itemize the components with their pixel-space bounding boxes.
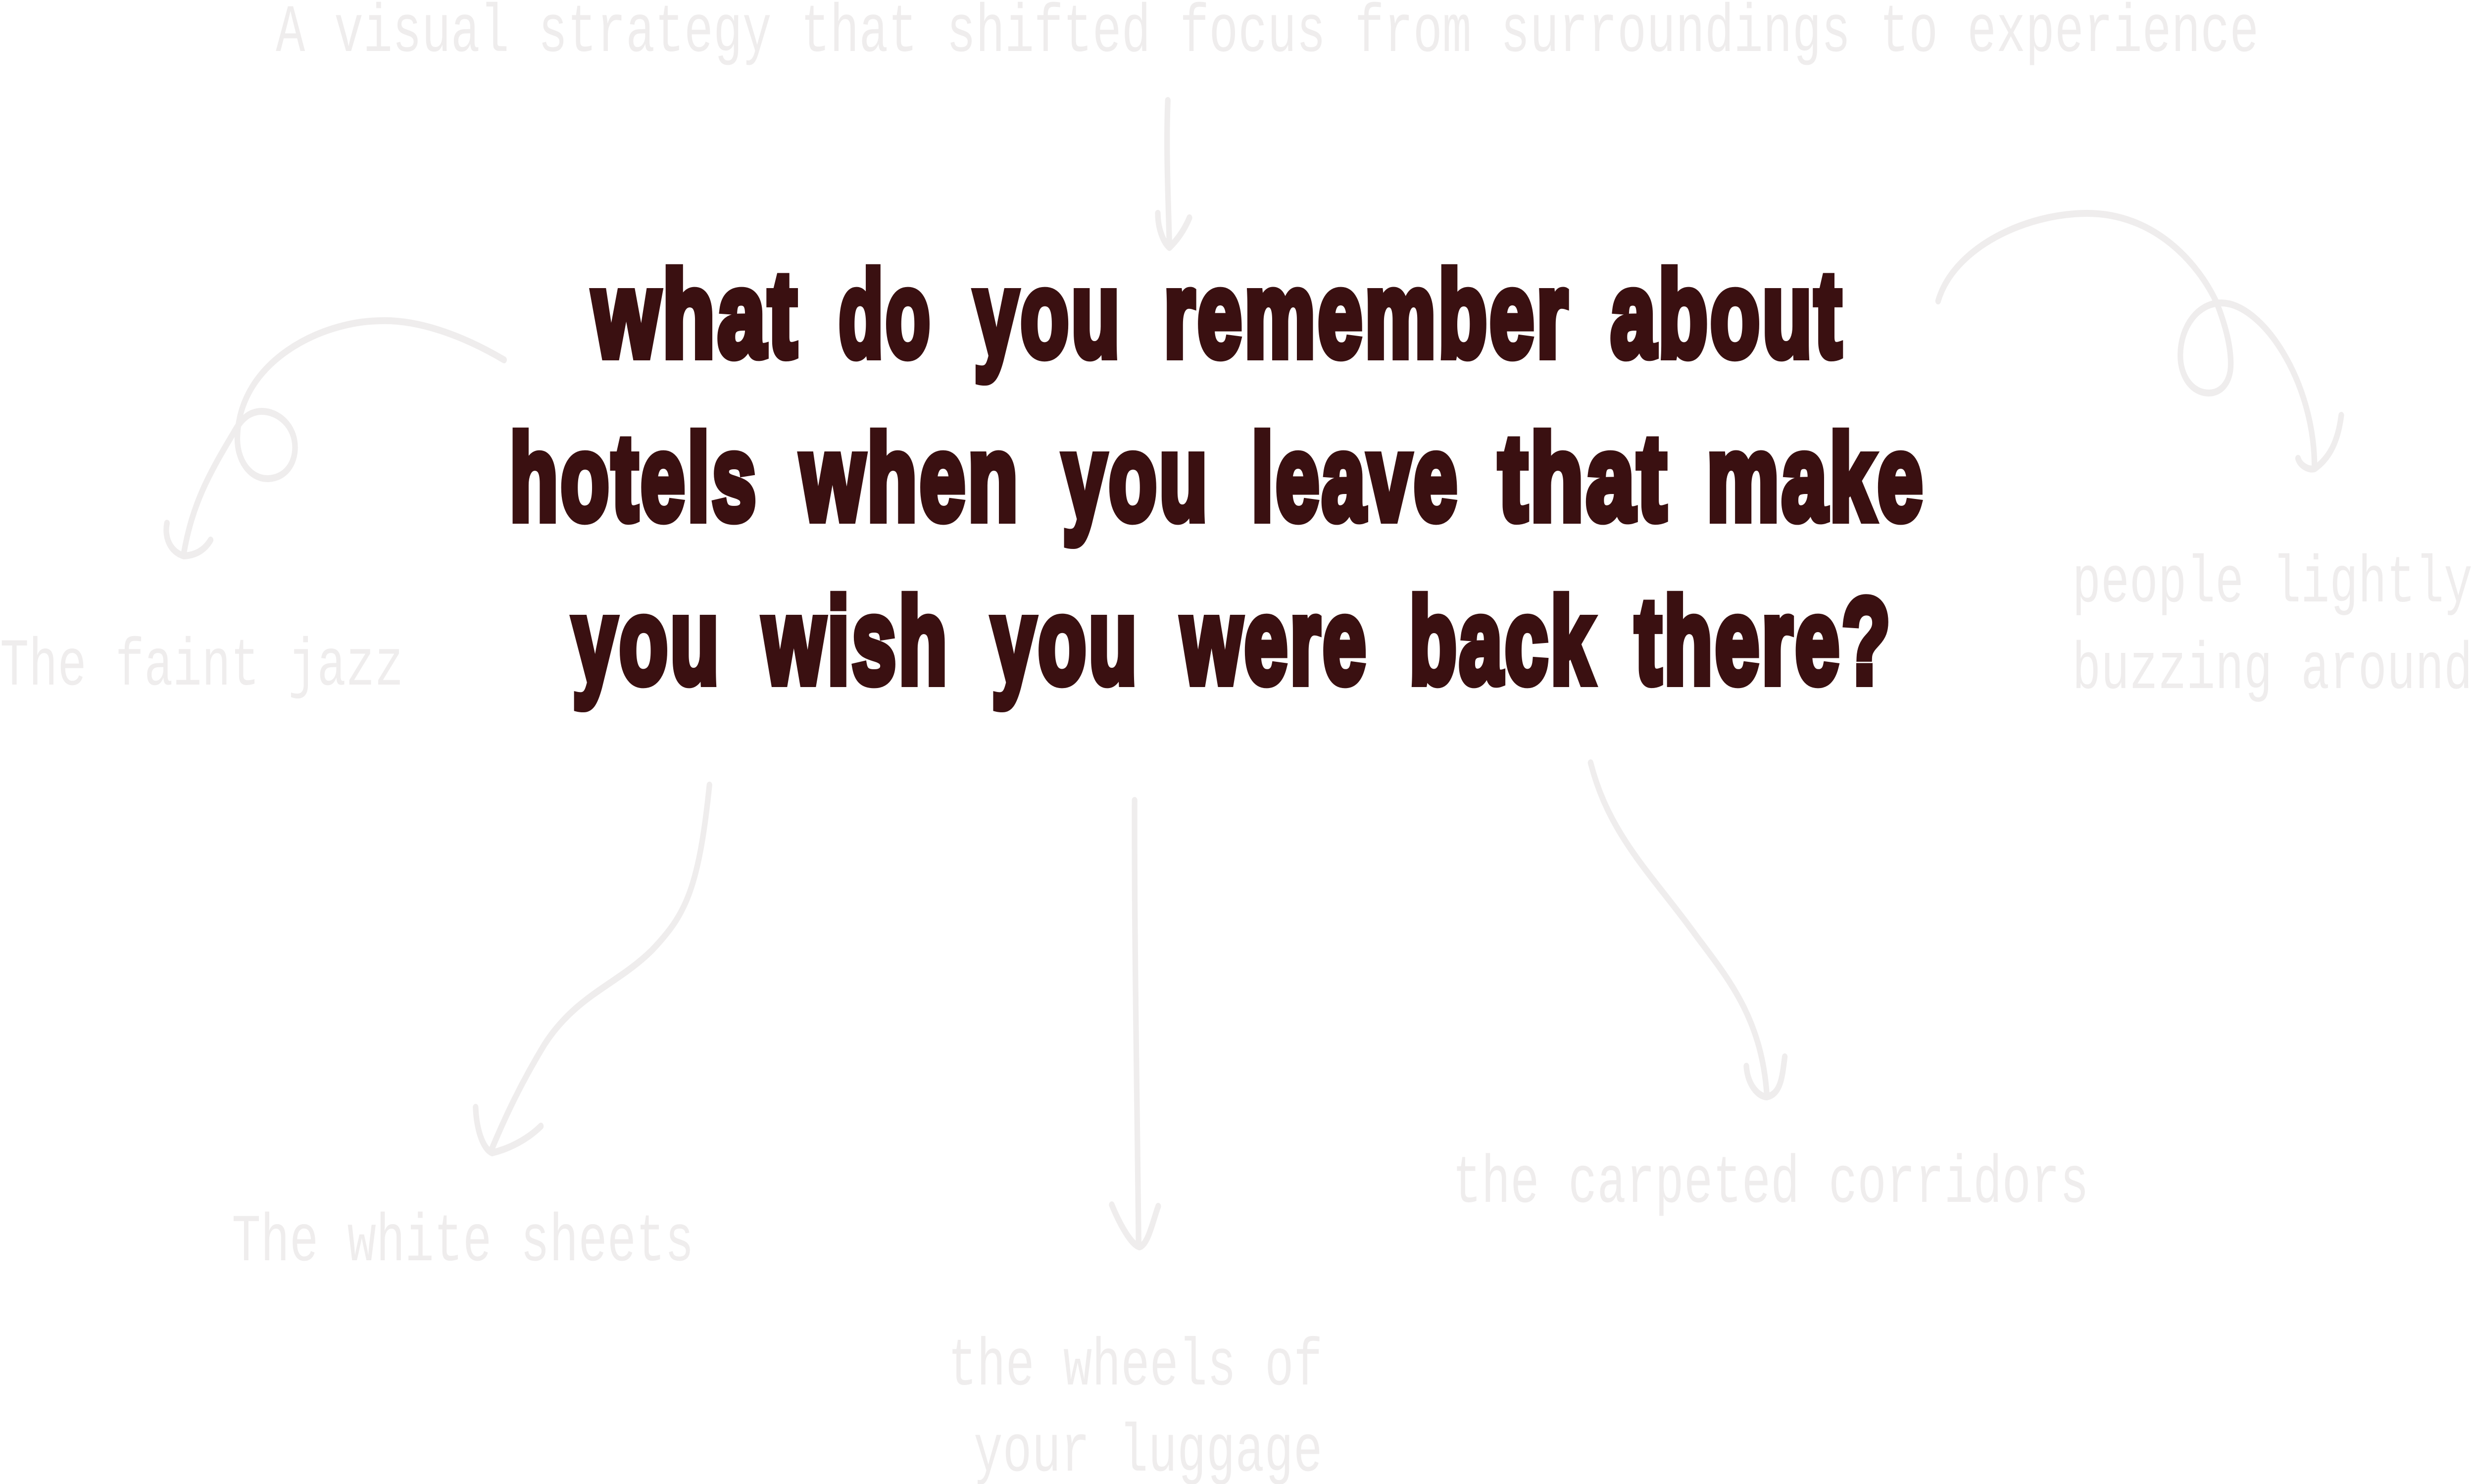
caption: the wheels of your luggage: the wheels of [948,1329,1323,1405]
headline line 2 [510,410,1926,546]
caption: people lightly buzzing around: people lightly [2072,547,2473,622]
headline line 3: there? [1635,573,1893,709]
arrow: top caption to headline [1158,100,1189,247]
arrow: right loop to people lightly buzzing [1938,213,2341,469]
headline line 1: about [1611,247,1844,383]
headline line 3 [573,573,1893,709]
arrow: left loop to faint jazz [166,321,504,556]
headline line 3: were [1181,573,1368,709]
headline line 1: do [839,247,933,383]
headline line 1: what [593,247,799,383]
headline line 3: back [1409,573,1596,709]
arrow: to white sheets [476,785,709,1153]
headline line 2: leave [1251,410,1460,546]
caption: people lightly buzzing around [2072,547,2473,708]
headline [510,247,1926,709]
caption: the faint jazz: The faint jazz [0,629,403,705]
headline line 3: you [991,573,1139,709]
caption: the white sheets: The white sheets [232,1205,694,1281]
headline line 2: make [1707,410,1926,546]
headline line 1: remember [1164,247,1570,383]
headline line 1: you [974,247,1122,383]
caption: people lightly buzzing around: buzzing around [2072,634,2473,708]
arrow: to wheels of luggage [1112,800,1158,1247]
headline line 3: you [573,573,721,709]
headline line 2: when [800,410,1021,546]
caption: the wheels of your luggage [948,1329,1323,1484]
caption: the carpeted corridors: the carpeted corridors [1452,1146,2089,1222]
headline line 2: that [1498,410,1669,546]
arrow: to carpeted corridors [1590,763,1785,1097]
headline line 3: wish [763,573,949,709]
headline line 2: hotels [510,410,759,546]
headline line 1 [593,247,1844,383]
headline line 2: you [1063,410,1210,546]
